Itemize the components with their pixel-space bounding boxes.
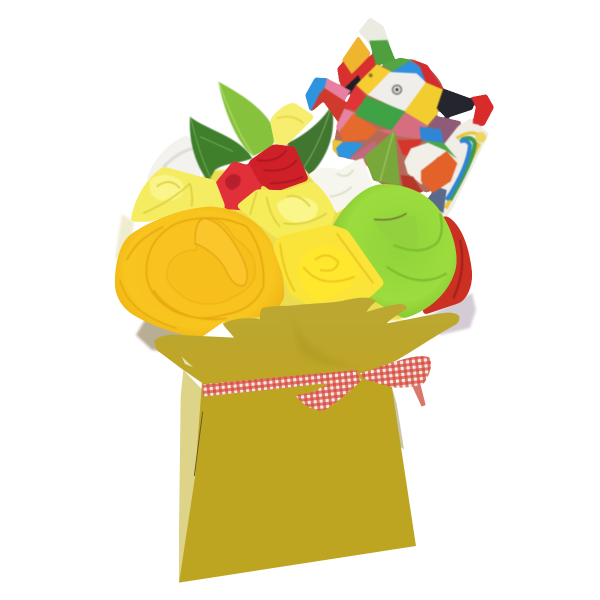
red socks roses [215,144,309,211]
green fleece roll [330,184,456,318]
red fleece at right [420,216,472,315]
ribbon: bow loop right [360,356,431,388]
rose: left red [215,161,261,211]
leaf: dark right [287,105,333,175]
white back flower [147,135,200,183]
wrap behind the bouquet [115,214,476,352]
box: scalloped rim [154,298,459,383]
box: front panel [179,363,416,583]
pale yellow roses [131,167,335,238]
left leg [305,78,351,123]
leaf: dark left [190,117,252,182]
right ear [419,89,494,145]
yellow sock rose [273,224,385,307]
head patches [333,58,444,161]
box: right side sliver [392,387,404,449]
big yellow rolled vest [115,207,284,338]
rose: left pale [131,167,226,222]
rose: right red [248,144,309,193]
elephant soft toy with rainbow book [305,17,494,219]
toy underlay [335,59,457,193]
ribbon: band [203,370,360,397]
pale yellow top rose [270,103,315,145]
box: left side panel [179,370,203,583]
ribbon: bow loop left [295,372,362,411]
rainbow book [427,115,489,219]
box: slit [194,412,203,476]
ribbon: tail right [412,385,426,407]
gift box [154,298,459,583]
bouquet underlay [170,170,440,325]
front foot [397,139,457,193]
white sock rose [308,158,373,213]
trunk [337,17,395,95]
leaves [190,82,333,182]
leaf: light green [218,82,275,156]
rose: center pale [236,181,335,238]
front leaf [364,130,400,186]
